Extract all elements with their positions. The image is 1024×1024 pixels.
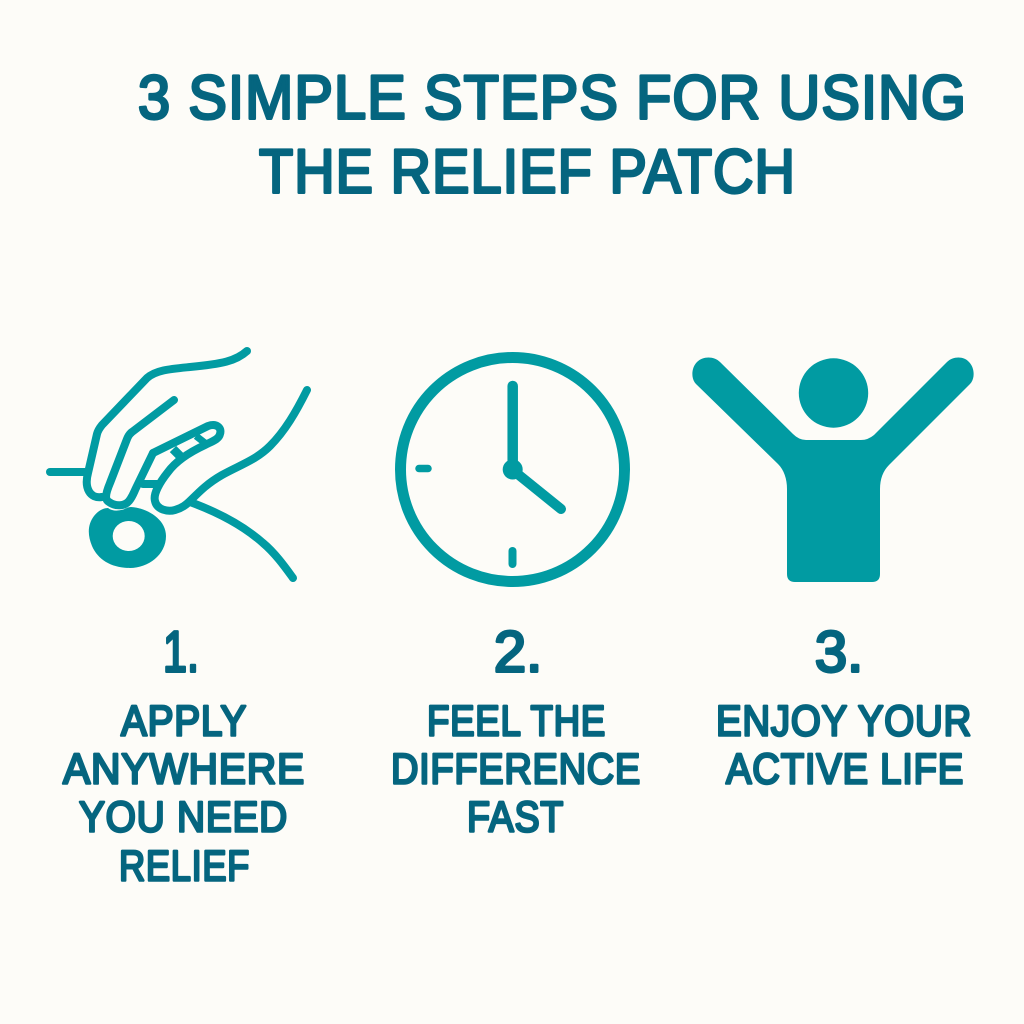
text: step 3 caption: ENJOY YOUR [716,698,972,746]
text: step 2 caption [391,698,641,842]
icon: hand applying patch [50,351,307,578]
number 3: 3. [815,620,863,684]
panel: step 2 [391,358,641,842]
icon: person with raised arms [692,358,974,582]
text: step 2 caption: FAST [467,794,564,842]
panel: step 3 [692,358,974,794]
text: step 2 caption: FEEL THE [427,698,606,746]
text: step 3 caption: ACTIVE LIFE [726,746,964,794]
text: step 1 caption: ANYWHERE [63,746,305,794]
title [138,64,967,206]
text: step 2 caption: DIFFERENCE [391,746,641,794]
title: 3 SIMPLE STEPS FOR USING [138,64,967,132]
panel: step 1 [50,351,307,891]
number 2: 2. [494,620,542,684]
text: step 1 caption: RELIEF [119,843,250,891]
icon: patch [89,507,166,568]
icon: clock [400,358,624,582]
number 1: 1. [163,620,199,684]
text: step 3 caption [716,698,972,794]
text: step 1 caption [63,698,305,891]
text: step 1 caption: YOU NEED [79,794,288,842]
text: step 1 caption: APPLY [121,698,247,746]
title: THE RELIEF PATCH [259,138,796,206]
